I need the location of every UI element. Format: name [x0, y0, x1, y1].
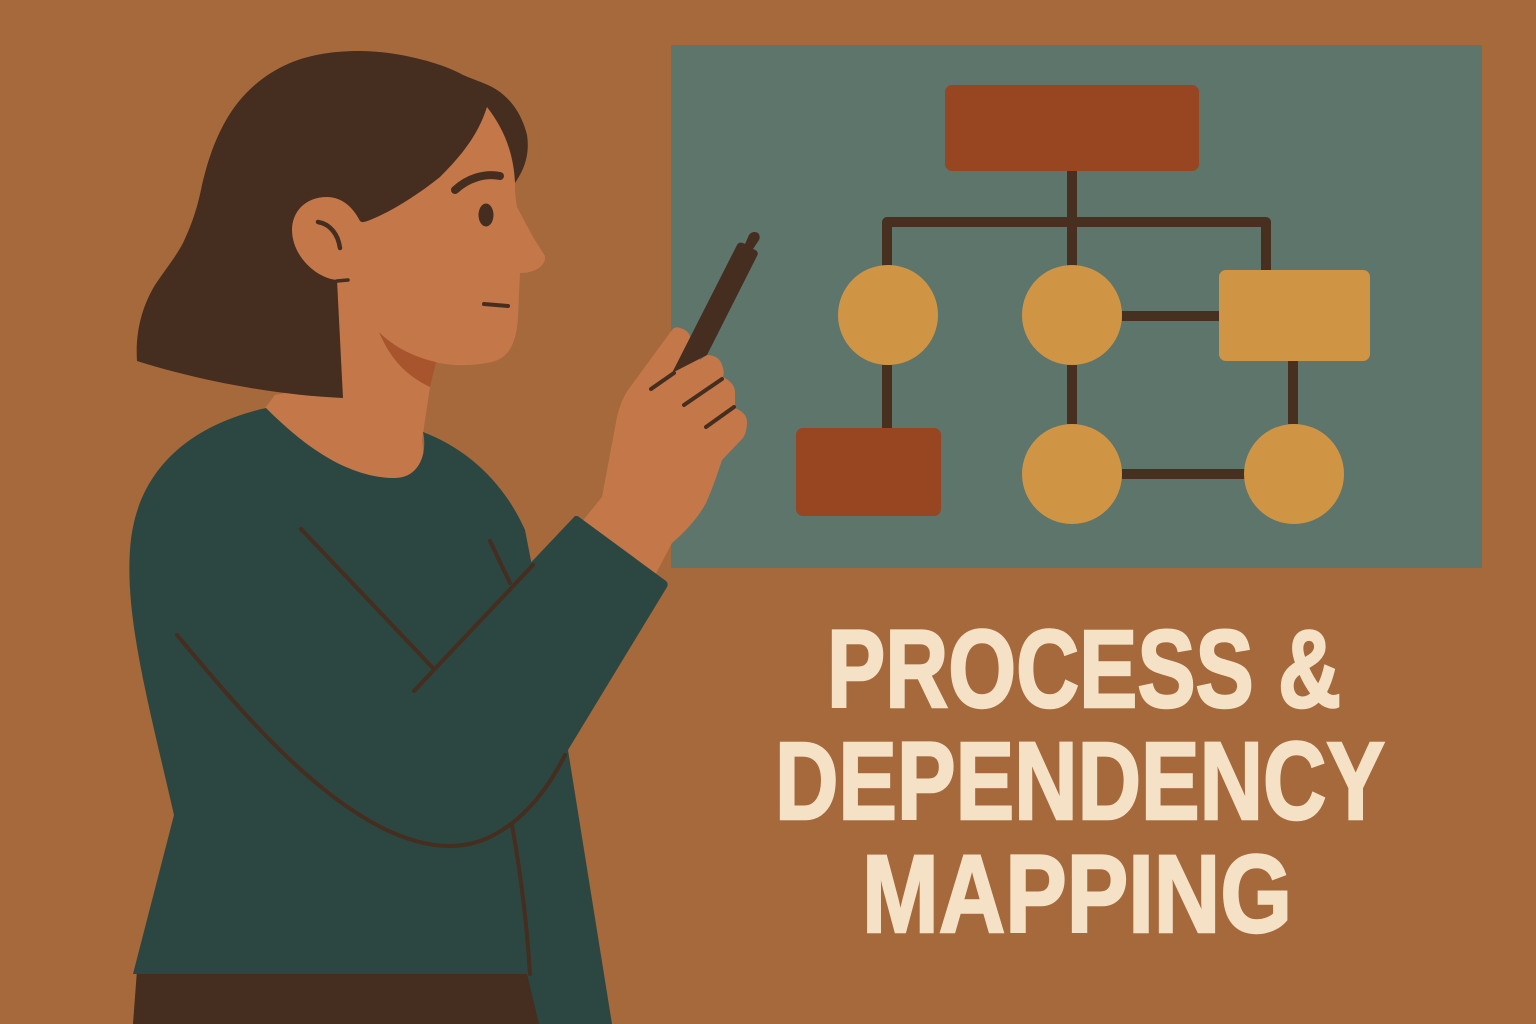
- hair: [137, 51, 528, 398]
- title: DEPENDENCY: [775, 720, 1385, 843]
- figure: woman holding a pen: [129, 51, 760, 1024]
- node: lower center circle: [1022, 424, 1122, 524]
- hand: [570, 327, 747, 585]
- title: PROCESS &: [827, 608, 1341, 731]
- node: right yellow box: [1219, 270, 1370, 361]
- sweater body: [129, 408, 612, 1024]
- eye: [478, 204, 494, 226]
- flowchart connectors: [887, 170, 1293, 474]
- node: lower left red box: [796, 428, 941, 516]
- trousers: [133, 970, 539, 1024]
- facial, clothing and finger lines: [177, 175, 734, 974]
- title: MAPPING: [862, 833, 1292, 956]
- node: lower right circle: [1244, 424, 1344, 524]
- node: top red box: [945, 85, 1199, 171]
- sleeve: [176, 516, 668, 846]
- face and ear: [292, 107, 545, 365]
- panel: flowchart board: [671, 45, 1482, 568]
- pen: [672, 232, 760, 373]
- title: [775, 608, 1385, 956]
- neck shadow: [379, 332, 436, 387]
- node: center circle: [1022, 265, 1122, 365]
- node: left circle: [838, 265, 938, 365]
- neck: [262, 270, 435, 490]
